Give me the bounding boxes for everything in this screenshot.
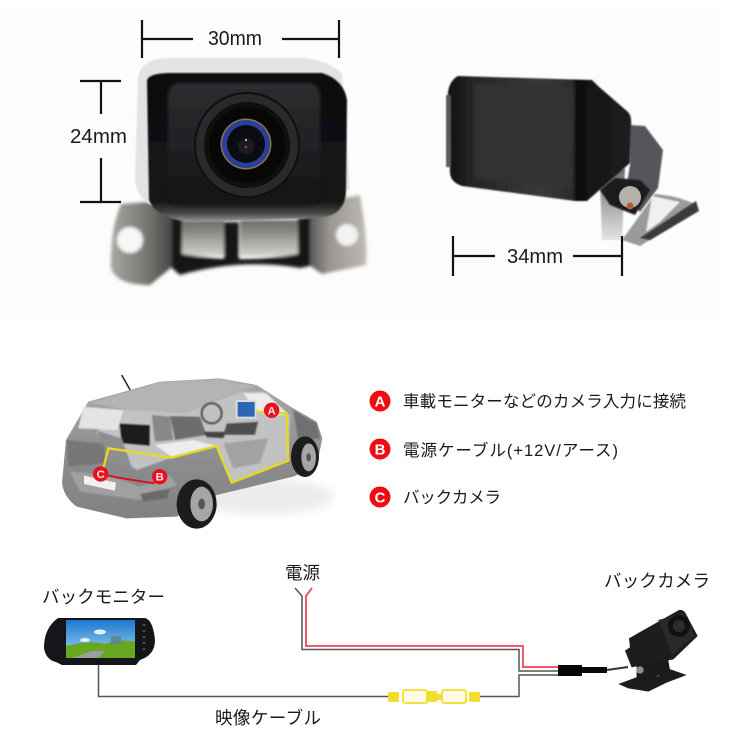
legend item A: 車載モニターなどのカメラ入力に接続: [403, 392, 686, 411]
icon: lens: [194, 92, 300, 198]
label: power source: 電源: [285, 563, 320, 583]
marker A: A: [268, 405, 276, 417]
icon: black camera body: [147, 73, 347, 222]
height dimension: 24mm: [70, 81, 127, 202]
icon: side bracket and screw: [600, 125, 699, 246]
panel: connection diagram: [42, 563, 710, 728]
marker C: [93, 466, 108, 482]
icon: car interior cutaway: [67, 379, 320, 502]
marker B: [152, 469, 167, 484]
legend: wiring key: [370, 390, 686, 508]
legend item B: 電源ケーブル(+12V/アース): [403, 440, 618, 460]
video cable wire: [98, 665, 558, 696]
panel: side view of camera with dimensions: [446, 76, 699, 276]
legend item B: B: [375, 442, 386, 458]
photo backdrop: [0, 8, 719, 322]
marker C: C: [97, 469, 105, 481]
icon: back camera on bracket: [618, 610, 698, 692]
icon: antenna: [122, 375, 134, 397]
icon: car body: [62, 378, 322, 518]
label: back camera: バックカメラ: [604, 571, 710, 591]
icon: side camera panel: [474, 84, 574, 188]
red power wire: [306, 588, 558, 667]
icon: yellow RCA connectors: [389, 690, 479, 703]
icon: cable junction: [558, 665, 628, 676]
width dimension: 30mm: 30mm: [208, 28, 262, 50]
icon: side camera body: [448, 76, 631, 201]
legend item A: A: [375, 394, 386, 410]
icon: lens edge: [446, 95, 451, 167]
icon: in-car monitor: [236, 400, 256, 419]
panel: car cutaway wiring illustration: [62, 375, 333, 529]
legend item C: バックカメラ: [403, 488, 501, 507]
icon: silver camera housing: [135, 58, 350, 205]
legend item C: C: [375, 490, 386, 506]
label: video cable: 映像ケーブル: [215, 708, 321, 728]
yellow video cable route: [103, 412, 288, 483]
marker A: [264, 403, 279, 418]
icon: camera front panel: [168, 83, 320, 205]
red power cable route: [101, 474, 159, 483]
icon: car shadow: [193, 478, 333, 515]
label: back monitor: バックモニター: [42, 587, 165, 607]
icon: front wheel: [291, 436, 319, 477]
icon: rear-view mirror monitor: [44, 618, 155, 665]
gray power wire: [295, 588, 558, 671]
height dimension: 24mm: 24mm: [70, 126, 127, 148]
width dimension: 30mm: [142, 20, 339, 58]
width dimension: 34mm: [453, 236, 622, 276]
legend item C: [370, 486, 501, 508]
icon: licence plate: [84, 476, 116, 491]
icon: mounting bracket: [111, 195, 366, 285]
marker B: B: [156, 472, 164, 484]
width dimension: 34mm: 34mm: [507, 246, 563, 268]
panel: front view of camera with dimensions: [70, 20, 366, 285]
icon: rear wheel: [177, 479, 217, 529]
